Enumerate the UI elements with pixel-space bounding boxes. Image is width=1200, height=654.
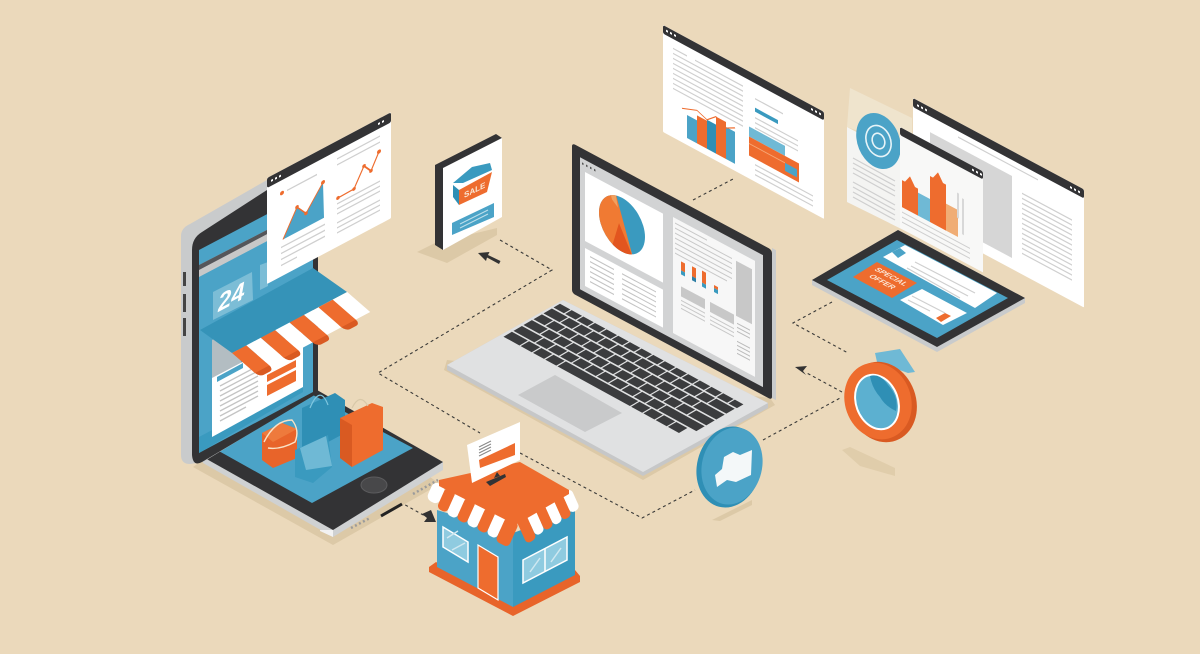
- poster shadow: [417, 228, 497, 263]
- floating chart window: [900, 127, 983, 272]
- shopping bags: [262, 393, 383, 483]
- small shop: [423, 422, 582, 616]
- right window: [523, 537, 567, 583]
- arrow: to poster: [478, 252, 500, 264]
- shop walls: [437, 510, 513, 607]
- shop sign: [467, 422, 520, 486]
- laptop shadow: [444, 360, 775, 480]
- laptop screen: [572, 141, 776, 402]
- product box: SALE: [464, 180, 486, 200]
- trackpad: [518, 375, 622, 432]
- phone base: [203, 390, 443, 537]
- floating report window: [663, 25, 824, 219]
- date label: 24: [217, 277, 245, 318]
- dashboard: text panel: [585, 248, 663, 328]
- phone shadow: [193, 455, 440, 545]
- arrow: to laptop: [795, 366, 807, 375]
- tablet promo card: OFFER: [866, 273, 898, 290]
- dashboard: pie panel: [585, 172, 663, 283]
- phone storefront: [181, 112, 443, 545]
- arrow bar chart: [902, 153, 963, 240]
- dashboard: bar panel: [673, 217, 755, 377]
- keyboard: [504, 304, 743, 437]
- floating poster: [417, 134, 502, 263]
- camera coin: [688, 419, 771, 521]
- bar chart: [682, 98, 735, 164]
- awning: [200, 268, 375, 377]
- target panel: [847, 88, 960, 258]
- tablet: [812, 230, 1025, 352]
- stopwatch: [834, 349, 928, 476]
- coin shadow: [712, 500, 752, 521]
- laptop base: [447, 300, 768, 476]
- tablet promo card: [853, 262, 917, 298]
- floating analytics window: [267, 112, 391, 284]
- right awning: [516, 488, 582, 544]
- laptop: [444, 141, 776, 480]
- gantt blocks: [749, 104, 799, 182]
- tablet button card: [900, 289, 967, 325]
- left window: [443, 527, 468, 562]
- tablet promo card: SPECIAL: [872, 267, 911, 287]
- far-right document window: [913, 98, 1084, 307]
- door: [478, 545, 498, 600]
- left awning: [423, 481, 519, 548]
- shop base: [429, 562, 580, 616]
- dashed connectors: [378, 178, 848, 518]
- stopwatch shadow: [842, 447, 895, 476]
- tablet message card: [883, 245, 997, 308]
- phone upright screen: [181, 180, 318, 464]
- arrow: to store: [422, 510, 436, 522]
- shop roof: [439, 462, 569, 524]
